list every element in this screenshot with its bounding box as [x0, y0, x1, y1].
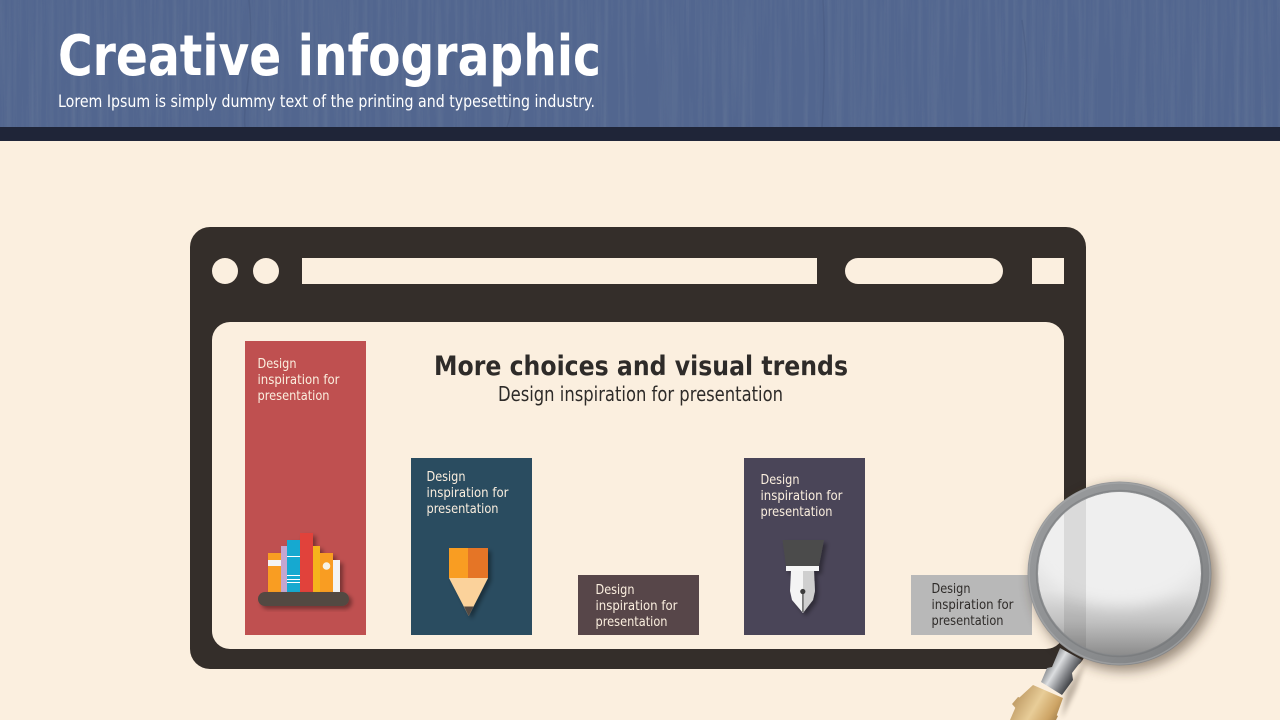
card text: Design — [932, 581, 970, 597]
title: Creative infographic — [58, 24, 601, 89]
card text: Design — [258, 356, 296, 372]
card text — [426, 469, 509, 517]
card text: inspiration for — [932, 597, 1014, 613]
content area — [212, 322, 1064, 649]
card text: inspiration for — [760, 488, 843, 504]
icon: books on shelf — [258, 533, 349, 606]
panel: red card — [245, 341, 366, 635]
panel: browser window — [190, 227, 1086, 669]
lens — [1038, 492, 1201, 654]
card text: Design — [596, 582, 634, 598]
card text — [596, 582, 678, 630]
subtitle: Lorem Ipsum is simply dummy text of the printing and typesetting industry. — [58, 92, 595, 112]
metal ring — [1028, 482, 1212, 666]
panel: purple card — [744, 458, 865, 635]
icon: pencil — [449, 548, 488, 616]
card text: Design — [426, 469, 466, 485]
panel: grey card — [911, 575, 1032, 635]
card text: Design — [760, 472, 800, 488]
icon: magnifying glass — [1010, 465, 1217, 720]
card text: presentation — [426, 501, 498, 517]
card text — [760, 472, 843, 520]
heading: More choices and visual trends — [434, 351, 848, 382]
card text: presentation — [596, 614, 668, 630]
handle — [1010, 648, 1086, 720]
address bar — [302, 258, 817, 284]
browser buttons — [212, 258, 279, 284]
card text: presentation — [760, 504, 832, 520]
header banner — [0, 0, 1280, 141]
card text — [932, 581, 1014, 629]
subheading: Design inspiration for presentation — [498, 382, 783, 406]
icon: fountain pen — [782, 540, 824, 613]
panel: teal card — [411, 458, 532, 635]
card text: presentation — [932, 613, 1004, 629]
card text: inspiration for — [258, 372, 340, 388]
panel: brown card — [578, 575, 699, 635]
menu square — [1032, 258, 1064, 284]
card text: inspiration for — [596, 598, 678, 614]
card text — [258, 356, 340, 404]
card text: presentation — [258, 388, 330, 404]
search pill — [845, 258, 1003, 284]
card text: inspiration for — [426, 485, 509, 501]
